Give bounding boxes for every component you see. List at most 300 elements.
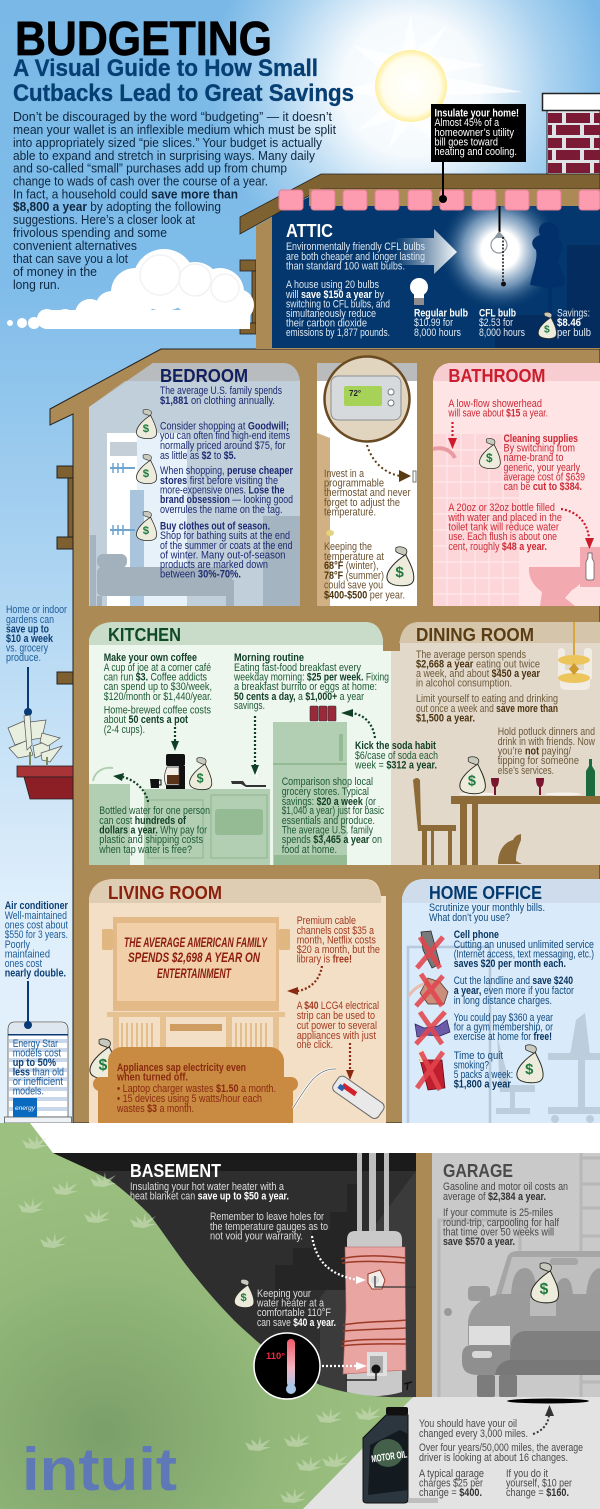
dotted arrow — [533, 1405, 554, 1434]
office text: exercise at home for free! — [454, 1031, 552, 1043]
icon: money bag — [234, 1279, 254, 1308]
dotted arrow — [346, 1043, 354, 1080]
heading: ATTIC — [286, 221, 333, 241]
bedroom text: The average U.S. family spends — [160, 385, 282, 397]
icon: energy star logo: energy — [15, 1106, 36, 1112]
bathroom text: A low-flow showerhead — [448, 398, 542, 410]
icon: power strip — [293, 1069, 386, 1120]
icon: dumbbell crossed out — [415, 1012, 450, 1044]
intro text: able to expand and stretch in surprising ways. Many daily — [13, 148, 315, 163]
dining text: in alcohol consumption. — [416, 678, 512, 690]
office text: in long distance charges. — [454, 995, 552, 1007]
comparison shopping text: savings: $20 a week (or — [282, 796, 376, 808]
dotted arrow — [322, 1362, 367, 1370]
comparison shopping text: The average U.S. family — [282, 824, 373, 836]
dining text: tipping for someone — [498, 755, 579, 767]
cable and electrical strip text — [297, 915, 380, 1051]
intro text: In fact, a household could save more than — [13, 186, 238, 202]
dotted arrow — [251, 716, 259, 775]
attic text: than standard 100 watt bulbs. — [286, 260, 405, 272]
bedroom text: $1,881 on clothing annually. — [160, 395, 275, 407]
dotted arrow — [287, 966, 322, 995]
panel: bathroom — [433, 363, 600, 606]
icon: money bag — [387, 547, 414, 586]
garden tip text: gardens can — [6, 614, 54, 626]
cable and electrical strip text: month, Netflix costs — [297, 934, 376, 946]
title: BUDGETING — [15, 13, 272, 66]
intro text — [13, 109, 336, 292]
garage door — [439, 1153, 600, 1397]
office text: Cut the landline and save $240 — [454, 975, 573, 987]
car — [444, 1251, 600, 1397]
bathroom text: generic, your yearly — [504, 462, 580, 474]
garage text: round-trip, carpooling for half — [443, 1217, 560, 1229]
intro text: that can save you a lot — [13, 251, 128, 266]
morning routine text: a breakfast burrito or eggs at home: — [234, 681, 377, 693]
coffee text: about 50 cents a pot — [104, 714, 188, 726]
oil text: driver is looking at about 16 changes. — [419, 1452, 568, 1464]
dining text — [416, 649, 595, 777]
bedroom text: When shopping, peruse cheaper — [160, 465, 294, 477]
heading: KITCHEN — [108, 625, 181, 645]
cable and electrical strip text: $20 a month, but the — [297, 944, 380, 956]
air conditioner text: Poorly — [5, 939, 30, 951]
heading: BATHROOM — [448, 366, 545, 386]
cable and electrical strip text: one click. — [297, 1039, 333, 1051]
morning routine text: Eating fast-food breakfast every — [234, 662, 362, 674]
intro text: $8,800 a year by adopting the following — [13, 199, 221, 214]
icon: air conditioner with energy star text: Energy Star — [13, 1038, 58, 1050]
oil text: changed every 3,000 miles. — [419, 1428, 528, 1440]
bulb cost comparison: Savings: — [557, 308, 590, 320]
bulb cost comparison: $8.46 — [557, 317, 581, 329]
coffee text: Home-brewed coffee costs — [104, 704, 211, 716]
appliance text — [116, 1062, 276, 1115]
intro text: change to wads of cash over the course of a year. — [13, 174, 268, 188]
icon: air conditioner with energy star text: up to 50% — [13, 1057, 56, 1069]
basement text — [130, 1181, 336, 1329]
air conditioner text: $550 for 3 years. — [5, 929, 68, 941]
thermostat text: $400-$500 per year. — [324, 590, 405, 602]
coffee text: A cup of joe at a corner café — [104, 662, 211, 674]
bedroom text: you can often find high-end items — [160, 430, 290, 442]
icon: money bag: $ — [99, 1057, 108, 1074]
insulation strips — [279, 190, 600, 210]
intro text: and so-called “small” purchases add up from chump — [13, 160, 287, 176]
panel: thermostat — [317, 356, 417, 606]
hill — [0, 1123, 413, 1509]
bathroom text: will save about $15 a year. — [448, 408, 548, 420]
air conditioner text — [5, 900, 69, 980]
cable and electrical strip text: channels cost $35 a — [297, 925, 374, 937]
panel: living room — [89, 879, 386, 1123]
air conditioner text: Well-maintained — [5, 910, 67, 922]
bedroom text: as little as $2 to $5. — [160, 450, 236, 462]
icon: thermometer: 110° — [266, 1351, 285, 1361]
bathroom text — [448, 398, 585, 553]
office text: smoking? — [454, 1060, 489, 1072]
garage text — [443, 1181, 568, 1248]
cloud — [7, 249, 254, 329]
morning routine text: 50 cents a day, a $1,000+ a year — [234, 691, 364, 703]
couch — [93, 1047, 298, 1123]
bulb cost comparison: 8,000 hours — [414, 327, 461, 339]
appliance text: wastes $3 a month. — [116, 1103, 194, 1115]
bedroom text: of winter. Many out-of-season — [160, 550, 286, 562]
dotted arrow — [113, 773, 148, 802]
sun — [211, 0, 600, 286]
stairs — [275, 1184, 360, 1290]
title — [13, 13, 354, 107]
morning routine text: weekday morning: $25 per week. Fixing — [233, 672, 389, 684]
thermostat text: Invest in a — [324, 468, 364, 480]
thermostat text — [324, 468, 411, 602]
icon: money bag: $ — [395, 564, 404, 581]
basement text: not void your warranty. — [210, 1230, 303, 1242]
thermostat icon: 72° — [349, 389, 361, 398]
entertainment headline: THE AVERAGE AMERICAN FAMILY — [124, 934, 268, 950]
mannequin — [530, 222, 565, 318]
arrow — [395, 229, 457, 274]
oil text: change = $400. — [419, 1487, 482, 1499]
comparison shopping text: Comparison shop local — [282, 776, 373, 788]
cable and electrical strip text: Premium cable — [297, 915, 356, 927]
dining text: $2,668 a year eating out twice — [416, 658, 540, 670]
icon: frying pan — [231, 767, 266, 787]
bulb cost comparison: $2.53 for — [479, 317, 513, 329]
coffee text: $120/month or $1,440/year. — [104, 691, 212, 703]
intro text: frivolous spending and some — [13, 225, 167, 240]
comparison shopping text: food at home. — [282, 844, 337, 856]
basement text: comfortable 110°F — [257, 1307, 331, 1319]
coffee text — [104, 652, 212, 736]
icon: money bag: $ — [540, 1281, 549, 1298]
heading: BASEMENT — [130, 1161, 221, 1181]
panel: basement — [40, 1153, 432, 1398]
oil text: yourself, $10 per — [506, 1478, 572, 1490]
icon: money bag: $ — [544, 325, 550, 336]
attic text: their carbon dioxide — [286, 318, 367, 330]
thermostat text: temperature at — [324, 551, 384, 563]
oil text: charges $25 per — [419, 1478, 483, 1490]
kitchen appliances — [89, 722, 347, 865]
comparison shopping text: spends $3,465 a year on — [282, 834, 382, 846]
intro text: into appropriately sized “pie slices.” Your budget is actually — [13, 135, 322, 150]
intro text: suggestions. Here’s a closer look at — [13, 212, 195, 227]
oil text: You should have your oil — [419, 1418, 517, 1430]
bulb cost comparison: $10.99 for — [414, 317, 453, 329]
intro text: of money in the — [13, 264, 97, 279]
callout: insulate your home — [431, 104, 526, 203]
air conditioner text: maintained — [5, 948, 50, 960]
attic text — [285, 241, 425, 339]
bulb cost comparison: Regular bulb — [414, 308, 468, 320]
bedroom text: between 30%-70%. — [160, 568, 241, 580]
icon: cigarettes crossed out — [417, 1050, 445, 1090]
office text: Cell phone — [454, 929, 499, 941]
appliance text: when turned off. — [116, 1072, 188, 1084]
dining text: $1,500 a year. — [416, 712, 475, 724]
cable and electrical strip text: strip can be used to — [297, 1010, 375, 1022]
bathroom text: A 20oz or 32oz bottle filled — [448, 502, 555, 514]
icon: money bag — [136, 454, 157, 484]
icon: air conditioner with energy star text: less than old — [13, 1066, 64, 1078]
bedroom text: of the summer or coats at the end — [160, 540, 292, 552]
wine glasses, plates and bottle — [459, 759, 595, 796]
heading: LIVING ROOM — [108, 883, 222, 903]
air conditioner text: ones cost about — [5, 920, 68, 932]
shower head — [433, 448, 455, 458]
coffee text: can spend up to $30/week, — [104, 681, 212, 693]
bulb cost comparison: per bulb — [557, 327, 591, 339]
appliance text: • Laptop charger wastes $1.50 a month. — [117, 1083, 276, 1095]
dining text: out once a week and save more than — [416, 703, 558, 715]
bedroom text — [160, 385, 294, 580]
air conditioner text: ones cost — [5, 958, 42, 970]
office text: saves $20 per month each. — [454, 958, 566, 970]
heading: BEDROOM — [160, 366, 248, 386]
driveway oil note — [419, 1398, 589, 1499]
callout: insulate your home: heating and cooling. — [434, 146, 517, 158]
thermostat text: 78°F (summer) — [324, 570, 384, 582]
white ground strip — [0, 1123, 600, 1509]
bedroom text: Buy clothes out of season. — [160, 520, 270, 532]
coffee text: Make your own coffee — [104, 652, 197, 664]
panel: home office — [402, 879, 600, 1123]
callout: insulate your home: Almost 45% of a — [434, 117, 499, 129]
dotted arrow — [312, 1236, 366, 1284]
bottled water text: when tap water is free? — [98, 844, 192, 856]
morning routine text — [233, 652, 389, 712]
icon: money bag: $ — [197, 771, 204, 785]
thermostat text: thermostat and never — [324, 487, 411, 499]
icon: regular bulb — [410, 278, 428, 305]
bottled water text: can cost hundreds of — [99, 815, 186, 827]
oil text: change = $160. — [506, 1487, 569, 1499]
dining table and chair — [413, 778, 600, 865]
bulb cost comparison — [414, 308, 591, 339]
dotted arrow — [448, 422, 457, 449]
thermostat text: programmable — [324, 478, 384, 490]
cable and electrical strip text: appliances with just — [297, 1030, 376, 1042]
icon: air conditioner with energy star text: models. — [13, 1086, 44, 1098]
icon: money bag — [479, 438, 500, 469]
cable and electrical strip text: library is free! — [297, 954, 352, 966]
oil text: A typical garage — [419, 1468, 484, 1480]
icon: motor oil bottle: MOTOR OIL — [371, 1449, 408, 1465]
icon: coffee maker — [150, 754, 185, 789]
office text: 5 packs a week: — [454, 1069, 513, 1081]
panel: kitchen — [89, 622, 438, 865]
icon: money bag: $ — [143, 468, 150, 480]
bathroom text: name-brand to — [504, 452, 564, 464]
oil stain — [507, 1398, 589, 1404]
basement text: heat blanket can save up to $50 a year. — [130, 1190, 289, 1202]
dotted arrow — [171, 727, 179, 751]
bottled water text: dollars a year. Why pay for — [99, 824, 207, 836]
soda text: week = $312 a year. — [354, 760, 437, 772]
appliance text: • 15 devices using 5 watts/hour each — [117, 1093, 262, 1105]
office text: for a gym membership, or — [454, 1022, 553, 1034]
air conditioner text: Air conditioner — [5, 900, 69, 912]
icon: money bag — [531, 1263, 559, 1303]
panel: bedroom — [89, 363, 300, 606]
callout: insulate your home: bill goes toward — [434, 136, 498, 148]
attic text: will save $150 a year by — [285, 289, 384, 301]
garage text: average of $2,384 a year. — [443, 1191, 546, 1203]
garage text: If your commute is 25-miles — [443, 1207, 553, 1219]
bedroom text: Consider shopping at Goodwill; — [160, 420, 289, 432]
dining text: you’re not paying/ — [498, 746, 571, 758]
icon: money plant in window box — [8, 667, 73, 799]
entertainment headline: ENTERTAINMENT — [157, 965, 232, 981]
panel: attic — [240, 174, 600, 349]
comparison shopping text: $1,040 a year) just for basic — [282, 805, 384, 817]
office text: You could pay $360 a year — [454, 1012, 553, 1024]
attic text: emissions by 1,877 pounds. — [286, 327, 390, 339]
bedroom text: overrules the name on the tag. — [160, 504, 282, 516]
panel: dining room — [391, 622, 600, 865]
bottled water text — [98, 805, 210, 856]
thermostat text: temperature. — [324, 506, 376, 518]
icon: water bottle — [586, 553, 594, 580]
thermostat icon — [324, 356, 410, 442]
chimney — [542, 94, 600, 174]
garage text: save $570 a year. — [443, 1236, 515, 1248]
intro text: mean your wallet is an inflexible medium which must be split — [13, 122, 336, 137]
heading: HOME OFFICE — [429, 883, 542, 903]
attic text: switching to CFL bulbs, and — [286, 298, 390, 310]
bottled water text: plastic and shipping costs — [99, 834, 203, 846]
garden tip text: $10 a week — [6, 633, 54, 645]
bathroom text: Cleaning supplies — [504, 433, 578, 445]
bathroom text: cent, roughly $48 a year. — [448, 541, 547, 553]
icon: money bag — [136, 511, 157, 541]
bathroom text: can be cut to $384. — [504, 481, 582, 493]
bathroom text: toilet tank will reduce water — [448, 522, 559, 534]
entertainment headline — [124, 934, 268, 981]
soda text: $6/case of soda each — [355, 750, 438, 762]
icon: money bag: $ — [486, 452, 493, 465]
icon: air conditioner with energy star text — [4, 981, 72, 1123]
icon: money bag: $ — [525, 1062, 534, 1078]
thermostat text: could save you — [324, 580, 383, 592]
office text: $1,800 a year — [454, 1078, 512, 1090]
icon: money bag — [517, 1045, 543, 1083]
coffee text: can run $3. Coffee addicts — [104, 672, 207, 684]
bathroom text: with water and placed in the — [448, 512, 562, 524]
garden tip text: save up to — [6, 624, 49, 636]
garden tip text: Home or indoor — [6, 604, 67, 616]
thermostat text: 68°F (winter), — [324, 560, 378, 572]
dotted arrow — [367, 445, 416, 482]
thermostat text: forget to adjust the — [324, 497, 400, 509]
office text: Scrutinize your monthly bills. — [429, 902, 545, 914]
basement text: Insulating your hot water heater with a — [130, 1181, 284, 1193]
icon: thermometer — [254, 1333, 320, 1399]
bathroom text: use. Each flush is about one — [448, 531, 557, 543]
dining text: else’s services. — [498, 765, 554, 777]
attic text: A house using 20 bulbs — [286, 279, 379, 291]
intro text: convenient alternatives — [13, 238, 137, 253]
cable and electrical strip text: cut power to several — [297, 1020, 377, 1032]
heading: DINING ROOM — [416, 625, 534, 645]
oil text: If you do it — [506, 1468, 548, 1480]
icon: money bag: $ — [143, 423, 150, 435]
water heater — [341, 1153, 416, 1396]
entertainment headline: SPENDS $2,698 A YEAR ON — [128, 949, 261, 965]
icon: air conditioner with energy star text: or inefficient — [13, 1076, 63, 1088]
basement text: Keeping your — [257, 1288, 311, 1300]
bedroom text: Shop for bathing suits at the end — [160, 530, 290, 542]
garage text: Gasoline and motor oil costs an — [443, 1181, 568, 1193]
attic text: are both cheaper and longer lasting — [286, 251, 425, 263]
icon: money bag — [90, 1039, 118, 1079]
bulb cost comparison: CFL bulb — [479, 308, 516, 320]
office text — [429, 902, 594, 1090]
morning routine text: savings. — [234, 700, 265, 712]
comparison shopping text — [282, 776, 384, 856]
dining text: The average person spends — [416, 649, 526, 661]
icon: motor oil bottle — [363, 1407, 438, 1503]
cable and electrical strip text: A $40 LCG4 electrical — [297, 1000, 379, 1012]
icon: cell phone crossed out — [417, 931, 443, 968]
dotted arrow — [561, 509, 594, 549]
light glow and bulb — [438, 188, 562, 312]
icon: money bag: $ — [241, 1292, 247, 1304]
callout: insulate your home: Insulate your home! — [434, 108, 519, 120]
icon: air conditioner with energy star text: models cost — [13, 1048, 61, 1060]
coffee text: (2-4 cups). — [104, 724, 145, 736]
attic text: simultaneously reduce — [286, 308, 376, 320]
heading: GARAGE — [443, 1161, 513, 1181]
intro text: Don’t be discouraged by the word “budgeting” — it doesn’t — [13, 109, 332, 124]
driveway — [303, 1397, 600, 1509]
basement text: water heater at a — [256, 1298, 324, 1310]
bedroom text: stores first before visiting the — [160, 475, 278, 487]
garden tip text — [6, 604, 67, 664]
basement text: Remember to leave holes for — [210, 1211, 324, 1223]
garden tip text: vs. grocery — [6, 642, 48, 654]
television — [102, 917, 290, 1052]
garden tip text: produce. — [6, 652, 41, 664]
bulb cost comparison: 8,000 hours — [479, 327, 525, 339]
comparison shopping text: grocery stores. Typical — [282, 786, 369, 798]
icon: money bag — [190, 757, 212, 790]
icon: money bag: $ — [143, 525, 150, 537]
icon: money bag — [460, 757, 485, 794]
dotted arrow — [341, 709, 375, 738]
air conditioner text: nearly double. — [5, 968, 66, 980]
icon: money bag: $ — [468, 773, 476, 789]
bathroom text: By switching from — [504, 442, 575, 454]
title: A Visual Guide to How Small — [13, 55, 318, 82]
garage text: that time over 50 weeks will — [443, 1226, 554, 1238]
bedroom text: more-expensive ones. Lose the — [160, 484, 284, 496]
toilet — [529, 547, 600, 606]
oil text — [419, 1418, 583, 1499]
soda text: Kick the soda habit — [355, 740, 436, 752]
basement text: can save $40 a year. — [257, 1317, 336, 1329]
office text: Time to quit — [454, 1050, 503, 1062]
wall to garage — [416, 1153, 432, 1397]
bedroom text: products are marked down — [160, 559, 268, 571]
appliance text: Appliances sap electricity even — [117, 1062, 246, 1074]
office text: a year, even more if you factor — [454, 985, 574, 997]
office text: What don’t you use? — [429, 912, 510, 924]
bedroom text: normally priced around $75, for — [160, 440, 286, 452]
comparison shopping text: essentials and produce. — [282, 815, 375, 827]
